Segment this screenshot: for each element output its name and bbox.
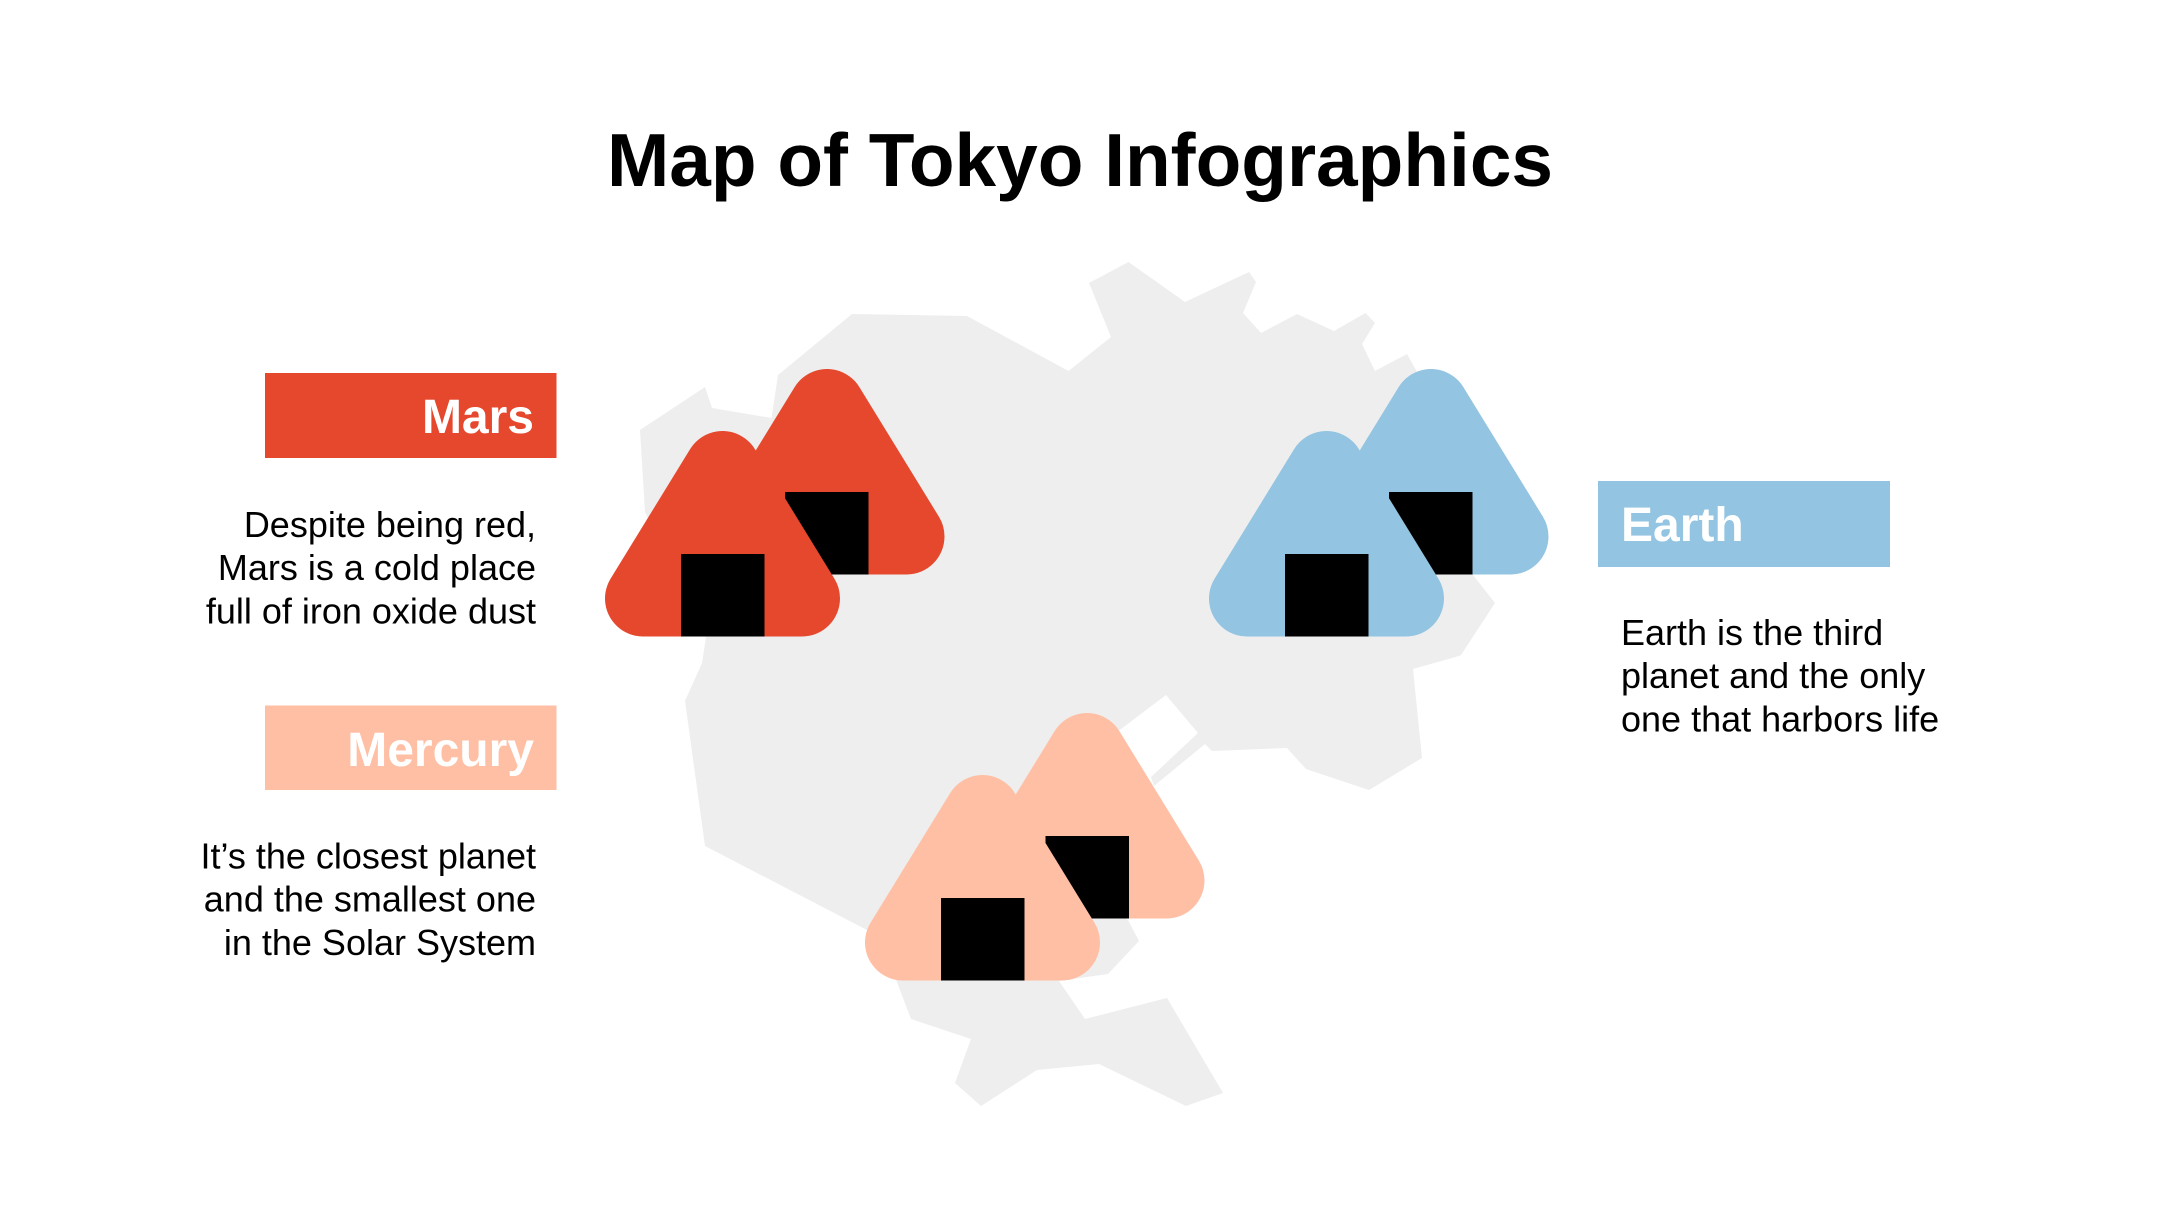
map of Tokyo — [640, 262, 1495, 1106]
label: Earth — [1598, 481, 1890, 567]
label: Mars: Mars — [422, 391, 534, 444]
label: Mercury: Mercury — [347, 724, 534, 777]
text: Mercury description: in the Solar System — [224, 922, 536, 963]
text: Earth description — [1621, 612, 1939, 740]
label: Earth: Earth — [1621, 499, 1744, 552]
Mercury marker: rice-ball pair — [903, 751, 1166, 980]
text: Earth description: one that harbors life — [1621, 698, 1939, 740]
text: Mars description — [206, 504, 536, 632]
label: Mars — [265, 373, 556, 458]
text: Mars description: full of iron oxide dust — [206, 590, 536, 632]
text: Mars description: Despite being red, — [244, 504, 536, 545]
text: Mercury description: It’s the closest planet — [200, 836, 536, 876]
label: Mercury — [265, 706, 556, 790]
text: Earth description: planet and the only — [1621, 655, 1925, 696]
text: Mercury description — [200, 836, 536, 963]
Earth marker: rice-ball pair — [1247, 407, 1510, 636]
text: Mercury description: and the smallest one — [204, 879, 536, 920]
title: Map of Tokyo Infographics — [607, 118, 1553, 202]
text: Mars description: Mars is a cold place — [218, 547, 536, 588]
Mars marker: rice-ball pair — [643, 407, 906, 636]
text: Earth description: Earth is the third — [1621, 612, 1883, 653]
